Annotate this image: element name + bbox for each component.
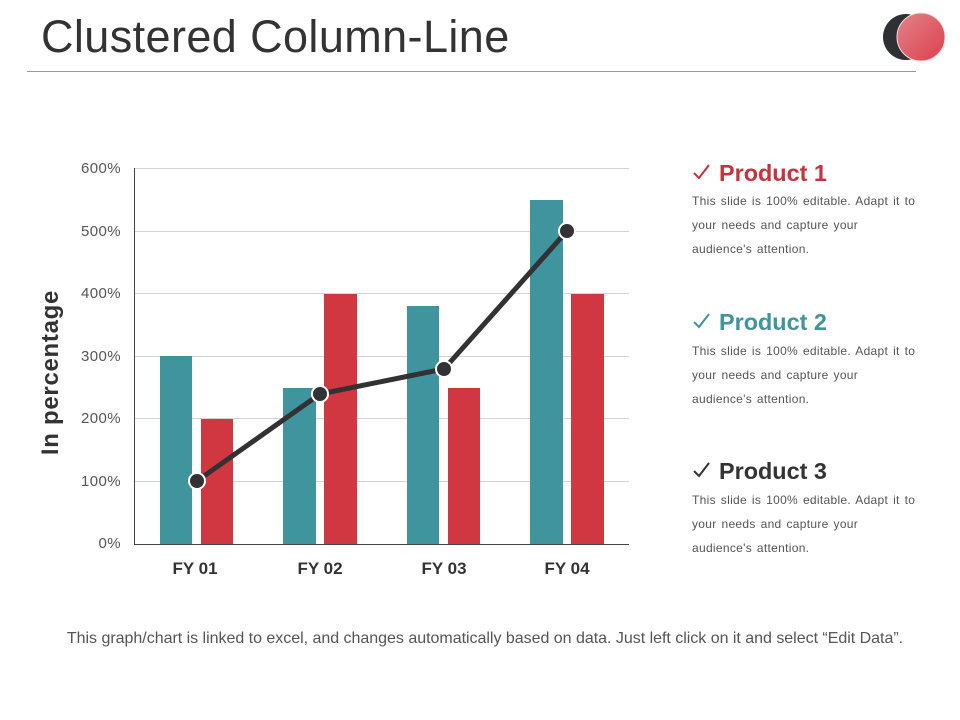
x axis labels: FY 03 <box>421 559 467 578</box>
text: product 2 <box>692 344 915 406</box>
heading: product 1: Product 1 <box>719 160 827 186</box>
text: product 1: audience's attention. <box>692 242 809 256</box>
text: product 1: This slide is 100% editable. Adapt it to <box>692 194 915 208</box>
y axis labels: 400% <box>81 285 121 302</box>
icon: check 1 <box>693 164 710 180</box>
y axis labels: 300% <box>81 348 121 365</box>
x axis labels: FY 04 <box>544 559 590 578</box>
title: Clustered Column-Line <box>41 11 510 62</box>
bars: product 1 <box>160 200 563 544</box>
heading: product 2: Product 2 <box>719 309 827 335</box>
clustered column-line chart <box>37 160 629 578</box>
icon: overlapping circles <box>883 12 946 62</box>
footer note: This graph/chart is linked to excel, and changes automatically based on data. Just left click on it and select “Edit Data”. <box>67 630 903 647</box>
y axis labels <box>81 160 121 552</box>
axes <box>134 168 629 545</box>
x axis labels <box>172 559 590 578</box>
text: product 3: audience's attention. <box>692 541 809 555</box>
text: product 3 <box>692 493 915 555</box>
text: product 3: your needs and capture your <box>692 517 858 531</box>
bars: product 2 <box>201 294 604 544</box>
y axis labels: 100% <box>81 473 121 490</box>
text: product 2: audience's attention. <box>692 392 809 406</box>
x axis labels: FY 02 <box>297 559 343 578</box>
line series: product 3 <box>189 223 575 489</box>
icon: check 2 <box>693 313 710 328</box>
y axis labels: 600% <box>81 160 121 177</box>
text: product 2: This slide is 100% editable. Adapt it to <box>692 344 915 358</box>
text: product 1: your needs and capture your <box>692 218 858 232</box>
y axis labels: 0% <box>99 535 121 552</box>
y axis labels: 500% <box>81 223 121 240</box>
text: product 3: This slide is 100% editable. Adapt it to <box>692 493 915 507</box>
y axis labels: 200% <box>81 410 121 427</box>
y axis title: In percentage <box>37 290 64 455</box>
text: product 2: your needs and capture your <box>692 368 858 382</box>
icon: check 3 <box>693 462 710 478</box>
heading: product 3: Product 3 <box>719 458 827 484</box>
text: product 1 <box>692 194 915 256</box>
x axis labels: FY 01 <box>172 559 218 578</box>
title rule <box>27 71 916 72</box>
